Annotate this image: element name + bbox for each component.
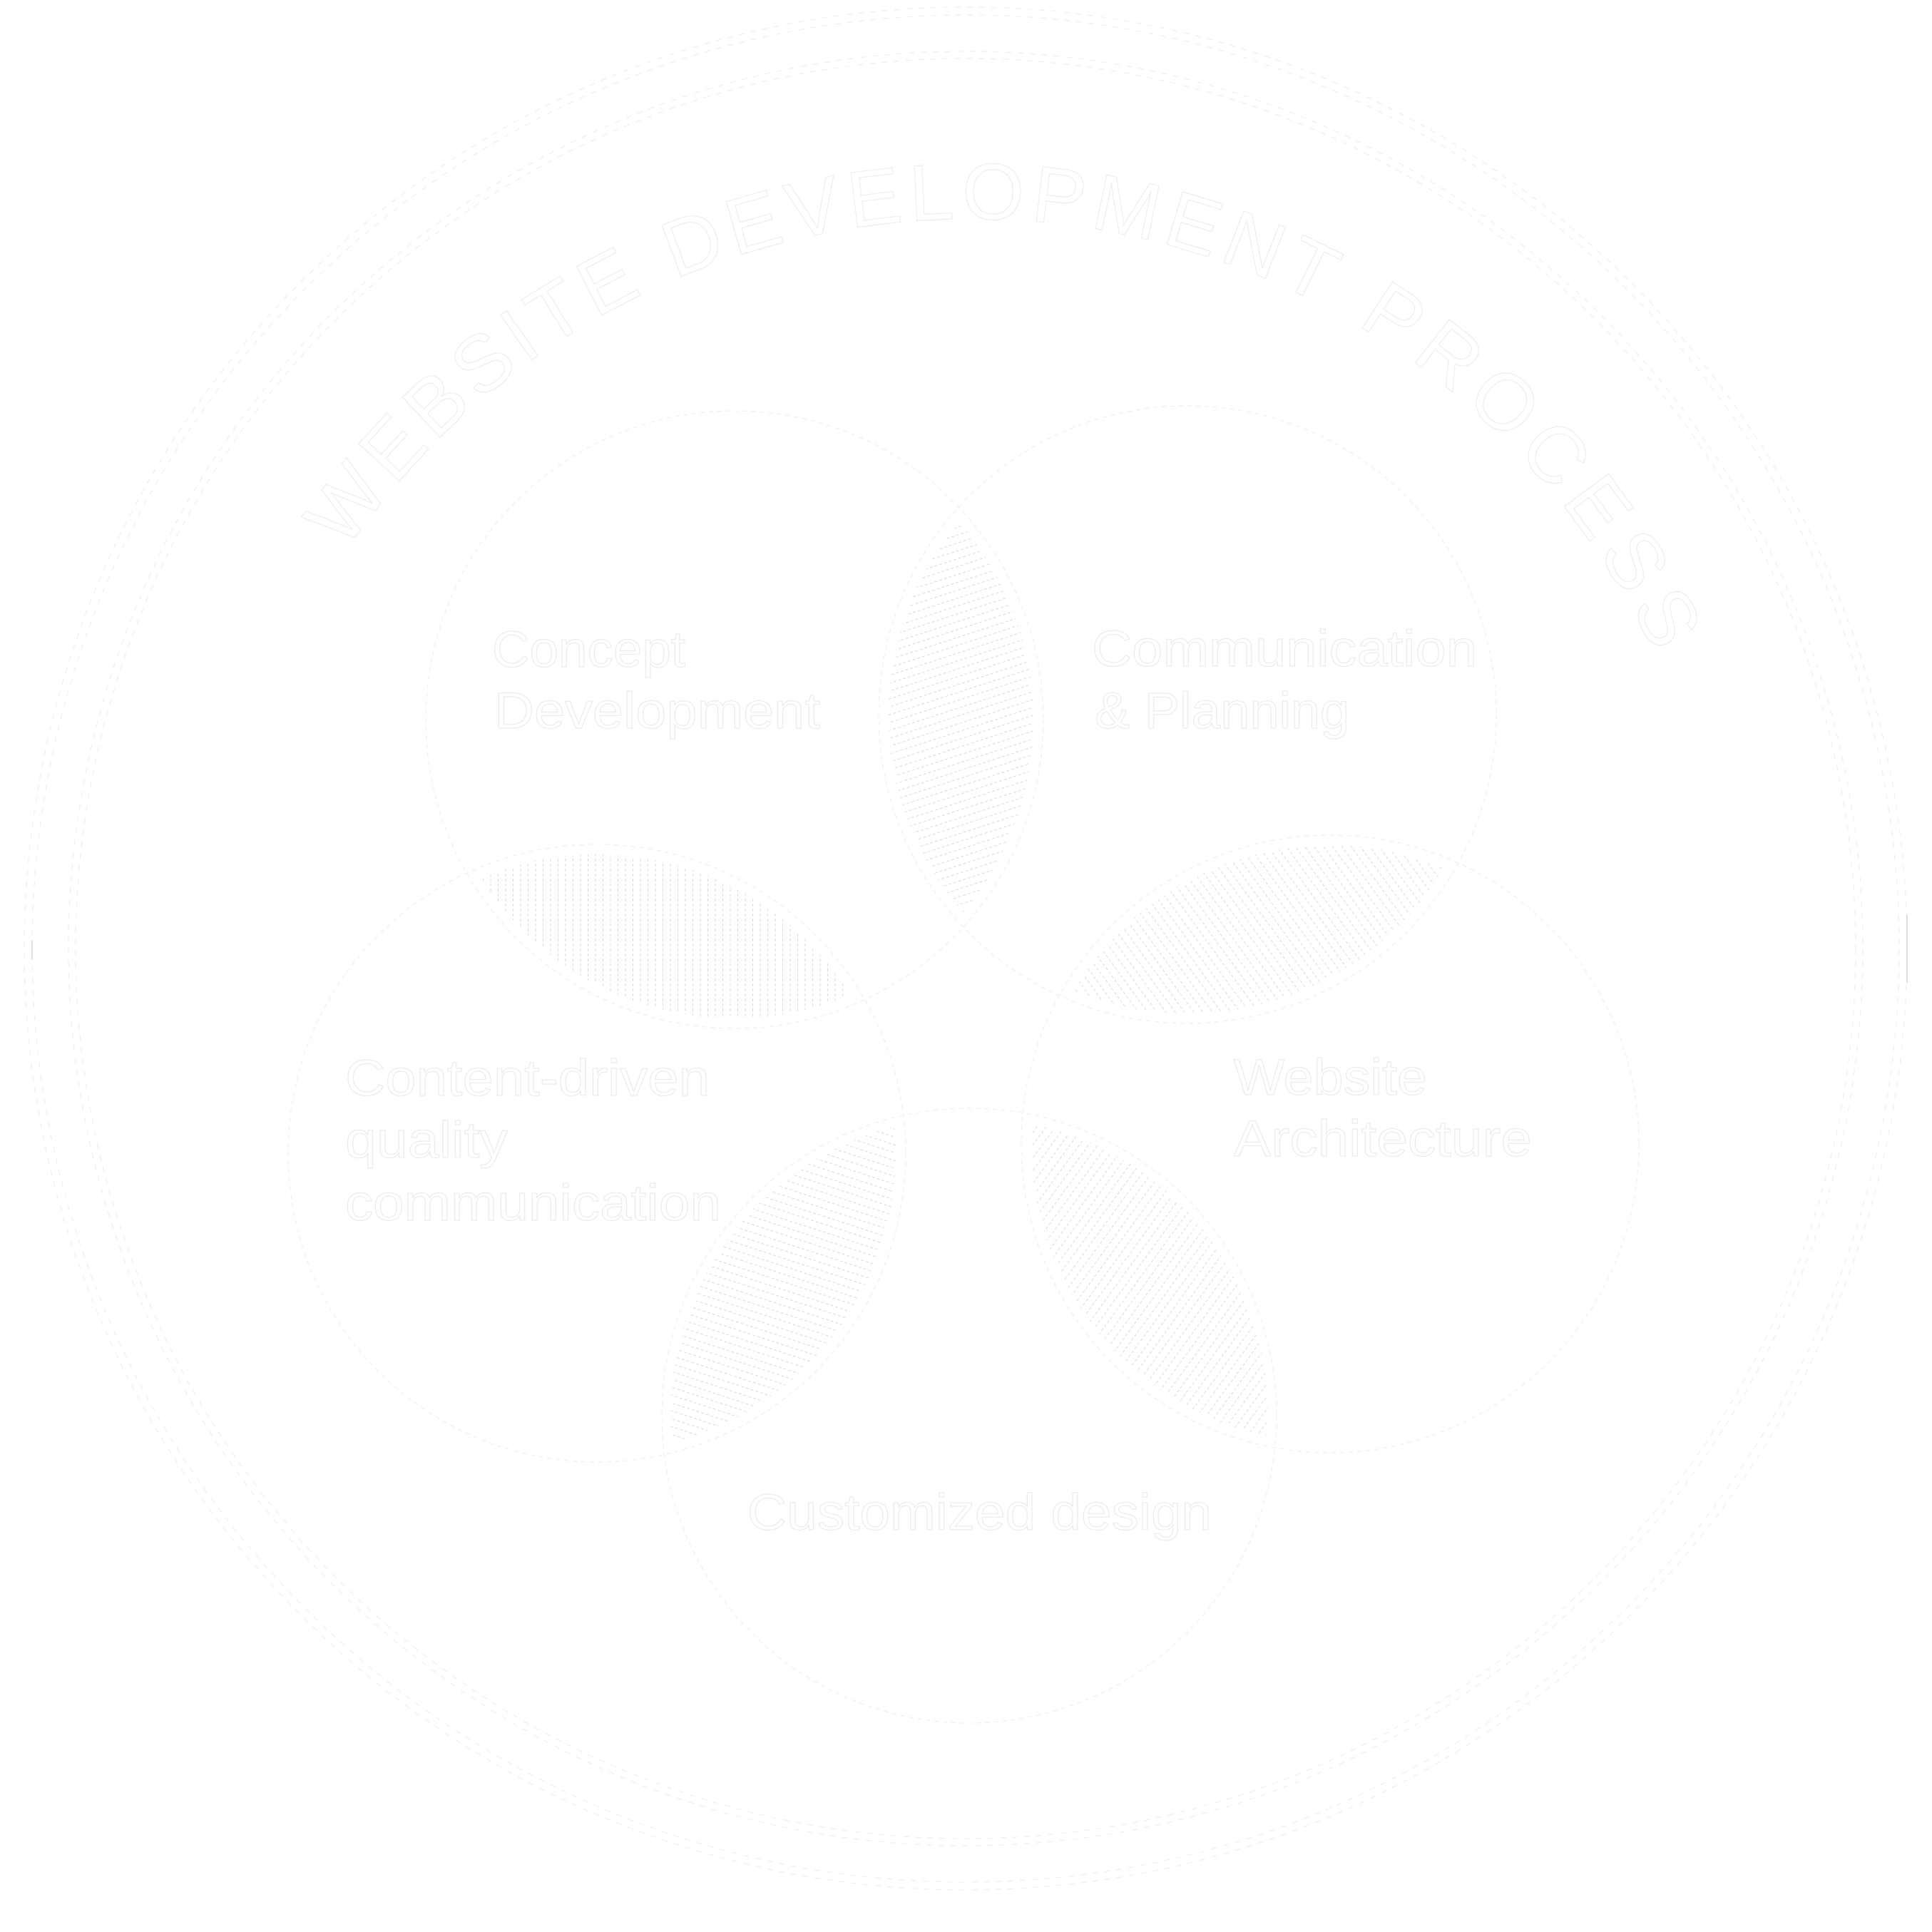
label: concept development [492, 622, 820, 740]
label: content-driven quality communication: Content-driven [345, 1051, 710, 1107]
petal diagram [288, 406, 1639, 1723]
circle: concept development [426, 411, 1043, 1028]
label: website architecture: Website [1234, 1050, 1427, 1106]
hatched overlap: architecture and customized [1031, 1127, 1268, 1436]
circle: customized design [662, 1108, 1277, 1723]
hatched overlap: concept and communication [889, 526, 1033, 911]
circle: website architecture [1021, 835, 1639, 1453]
label: content-driven quality communication [345, 1051, 721, 1232]
label: website architecture: Architecture [1234, 1111, 1532, 1167]
label: communication and planning: & Planning [1095, 683, 1349, 740]
circle: communication and planning [879, 406, 1496, 1023]
label: concept development: Concept [492, 622, 685, 678]
hatched overlap: customized and content [670, 1128, 896, 1442]
label: content-driven quality communication: quality [345, 1113, 508, 1169]
hatched overlap: communication and architecture [1075, 846, 1442, 1013]
hatched overlap: content and concept [483, 854, 850, 1016]
title: curved heading: WEBSITE DEVELOPMENT PROCESS [301, 163, 1697, 646]
label: customized design: Customized design [747, 1485, 1212, 1541]
label: concept development: Development [494, 683, 820, 740]
label: content-driven quality communication: communication [345, 1175, 721, 1232]
label: communication and planning: Communication [1092, 621, 1477, 678]
label: communication and planning [1092, 621, 1477, 740]
circle: content-driven quality communication [288, 844, 906, 1462]
label: website architecture [1234, 1050, 1532, 1167]
